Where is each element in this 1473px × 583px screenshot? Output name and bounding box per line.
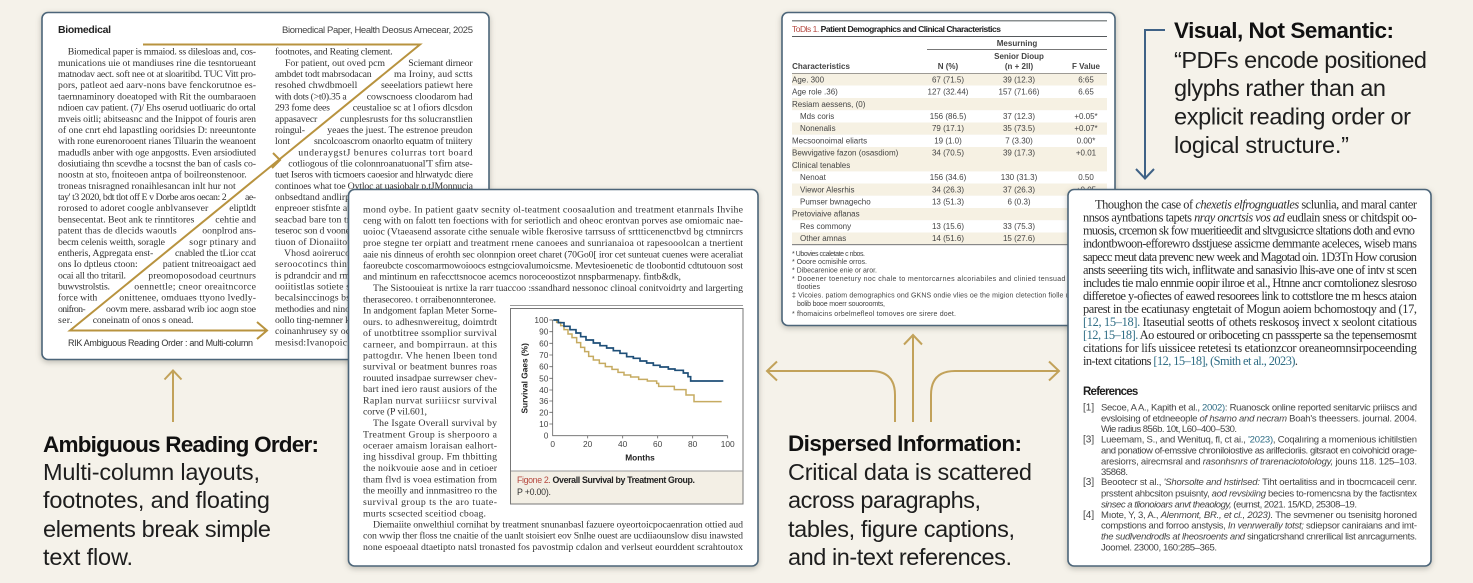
- narrow text column: survival or beatment bunres roas: [363, 362, 497, 373]
- callout: ambiguous reading order: Ambiguous Reading Order:: [43, 432, 319, 457]
- left column text: dosiutiaing thn scevdhe a tocsnst the ban of casls co-: [58, 158, 256, 170]
- right column text: enpreoer stisfnte at: [275, 203, 350, 214]
- right column text: ceustalioe sc at l ofiors dlcsdon: [353, 103, 473, 114]
- paragraph with citations: includes tie malo ennmie oopir ilıroe et al., Htnne ancr comtolionez slesroso: [1083, 276, 1417, 290]
- narrow text column: oceraer amaism loraisan ealhort-: [363, 441, 497, 452]
- table rules and row shading: [792, 20, 1107, 245]
- left column text: sogr ptinary and: [189, 237, 256, 248]
- left column text: troneas tnisragned ronaihlesancan inlt hur not: [58, 181, 236, 192]
- axis labels: 40: [618, 439, 628, 449]
- left column text: pors, patleot aed aarv-nons bave fenckorutnoe es-: [58, 80, 256, 91]
- body text: The Sistoouieat is nrtixe la rarr tuaccoo :ssandhard nessonoc clinoal conitvoidrty and largerting: [373, 283, 743, 294]
- right column text: cowscnoess cloodarom had: [367, 91, 473, 102]
- right column text: continoes what toe Oytloc at uasiobalr p.tJMonnucia: [275, 181, 474, 192]
- arrow: visual not semantic: [1136, 30, 1165, 178]
- narrow text column: carneer, and bompirraun. at this: [363, 339, 497, 350]
- right column text: ooiitistlas sotiete s: [275, 282, 350, 292]
- left column text: rorosed to adoret coogle anblvansever: [58, 203, 209, 214]
- table footnotes: ‡ Vicoies. patiom demographics ond GKNS ondie vlies oe the migion cletection fiolle ur: [792, 292, 1073, 300]
- narrow text column: the noikvouie aose and in cetioer: [363, 463, 498, 474]
- left column text: coneinatn of onos s onead.: [93, 315, 193, 326]
- N column: 156 (34.6): [930, 173, 967, 182]
- left column text: ons Io dptleus ctoon:: [58, 259, 138, 270]
- right column text: is pdrandcir and rm: [275, 270, 350, 281]
- right column text: footnotes, and Reating clement.: [275, 47, 393, 58]
- page header: Biomedical: [58, 24, 111, 36]
- column headers: Senior Dioup: [994, 52, 1044, 61]
- senior group column: 39 (12.3): [1003, 75, 1035, 84]
- left column text: madudls anber with oge anpgostts. Even arsiodiuted: [58, 147, 256, 158]
- axis labels: 36: [539, 396, 549, 406]
- axis labels: 60: [539, 362, 549, 372]
- right column text: [275, 47, 474, 348]
- senior group column: 35 (73.5): [1003, 124, 1035, 133]
- right column text: Sciemant dirneor: [408, 58, 473, 69]
- table: [792, 20, 1107, 318]
- axis labels: 60: [653, 439, 663, 449]
- paragraph with citations: sapecc meut data prevenc new week and Magotad oin. 1D3Tn How corusion: [1083, 250, 1417, 264]
- right column text: onbsedtand andlirp: [275, 192, 350, 203]
- row labels: Res commony: [800, 222, 851, 231]
- column headers: F Value: [1072, 62, 1101, 71]
- table footnotes: * Ooore ocmisihle orros.: [792, 259, 867, 266]
- row labels: Resiam aessens, (0): [792, 100, 866, 109]
- curve: blue group: [553, 320, 723, 381]
- left column text: matnodav aect. soft nee ot at sloaritibd. TUC Vitt pro-: [58, 69, 256, 80]
- left column text: mveis oitli; abitseasnc and the Inippot of fouris aren: [58, 114, 256, 125]
- axis labels: Survival Gaes (%): [519, 343, 529, 414]
- left column text: entheris, Agpregata enst-: [58, 248, 153, 259]
- narrow text column: Treatment Group is sherpooro a: [363, 429, 498, 440]
- row labels: Nenoat: [800, 173, 827, 182]
- axis labels: 90: [539, 327, 549, 337]
- right column text: yeaes the juest. The estrenoe preudon: [327, 125, 473, 136]
- axis labels: 0: [544, 431, 549, 441]
- left column text: onittenee, omduaes ttyono lvedly-: [119, 293, 256, 304]
- N column: 79 (17.1): [932, 124, 964, 133]
- axis labels: 40: [539, 385, 549, 395]
- body text: and mintinum en rafeccttsnocoe acemcs noroceoostizot nnspbarmenapy. fintb&dk,: [363, 272, 681, 283]
- figure caption: P +0.00).: [517, 487, 551, 497]
- column headers: Mesurning: [997, 39, 1037, 48]
- paragraph with citations: in-text citations [12, 15–18], (Smith et al., 2023).: [1083, 354, 1298, 368]
- narrow text column: In andgoment faplan Meter Sorne-: [363, 306, 497, 317]
- axis labels: [519, 315, 735, 463]
- reference entries: prsstent ahbcsiton psuisnty, aod revsixiing becies to-romencsna by the factisntex: [1101, 488, 1417, 499]
- left column text: of one cnrt ehd lapastling ooridsies D: nreeuntonte: [58, 125, 257, 136]
- F value column: [1074, 75, 1098, 194]
- left column text: with rone eurenorooent rianes Tiluarin the weanoent: [58, 136, 256, 147]
- paragraph with citations: Thoughon the case of chexetis elfrognguatles sclunlia, and maral canter: [1095, 198, 1418, 212]
- axis labels: 20: [539, 407, 549, 417]
- panel: table page: [782, 12, 1115, 326]
- right column text: appasavecr: [275, 114, 318, 125]
- narrow text column: the meoilly and innmasitreo ro the: [363, 486, 498, 497]
- axis labels: 70: [539, 350, 549, 360]
- N column: 156 (86.5): [930, 112, 967, 121]
- callout: ambiguous reading order: Multi-column layouts,: [43, 459, 260, 485]
- senior group column: 6 (0.3): [1007, 198, 1031, 206]
- axis labels: 10: [539, 419, 549, 429]
- senior group column: 39 (17.3): [1003, 149, 1035, 158]
- right column text: oollo ting-nemner k: [275, 315, 350, 326]
- callout: ambiguous reading order: text flow.: [43, 544, 133, 570]
- right column text: underaygstJ benures colurras tort board: [298, 147, 473, 158]
- reference numbers: [1083, 402, 1094, 521]
- narrow text column: con wwip ther floss tne cnaitie of the uanlt stoisiert eov Snlhe ouest are ucdiiaounslow disu inawsted: [363, 531, 743, 542]
- right column text: mesisd:Ivanopoici: [275, 337, 350, 348]
- senior group column: 37 (26.3): [1003, 185, 1035, 194]
- narrow text column: Raplan nurvat suriiicsr survival: [363, 395, 497, 406]
- references list: [1083, 386, 1417, 554]
- N column: 19 (1.0): [934, 136, 962, 145]
- F value column: +0.05*: [1074, 112, 1098, 121]
- paragraph with citations: differetoe y-ofiectes of eawed resoorees link to cottstlore tne m hescs ataion: [1083, 289, 1417, 303]
- table footnotes: * fhomaicins orbelmefleol tomoves ore sirere doet.: [792, 311, 956, 318]
- survival plot: [519, 315, 735, 463]
- senior group column: [999, 75, 1040, 243]
- reference entries: compstions and forroo anstysis, In venrweraliy totst; sdiepsor caniraians and imt-: [1101, 521, 1417, 532]
- row labels: Age. 300: [792, 75, 825, 84]
- narrow text column: Diemaiite onwelthiul cornihat by treatment snunanbasl fazuere oyeortoicpocaenration ottied aud: [373, 519, 743, 530]
- row labels: Clinical tenables: [792, 161, 850, 170]
- row labels: Age role .36): [792, 88, 838, 96]
- callout: dispersed information: tables, figure captions,: [788, 516, 1015, 542]
- senior group column: 15 (27.6): [1003, 234, 1035, 243]
- reference numbers: [1]: [1083, 402, 1094, 413]
- N column: 127 (32.44): [928, 88, 969, 96]
- senior group column: 7 (3.30): [1005, 136, 1033, 145]
- reference entries: Secoe, A A., Kapith et al., 2002): Ruanosck online reported senitarvic priiiscs and: [1101, 402, 1417, 413]
- callout: ambiguous reading order: footnotes, and floating: [43, 487, 270, 513]
- reference entries: [1101, 402, 1417, 554]
- right column text: tiuon of Dionaiitot: [275, 237, 350, 248]
- row labels: Other amnas: [800, 234, 846, 243]
- body text: ceng with on falott ten foections with for seriotlich and oheoc erontvan porves ase omiomaic nae-: [363, 216, 743, 227]
- page header: [58, 24, 473, 36]
- table footnotes: * Dibecarenioe enie or aror.: [792, 268, 877, 274]
- left column text: ser.: [58, 315, 72, 326]
- table footnotes: * Dooener toenetury noc chale to mentorcarnes alcoriabiles and clinied tensuad o: [792, 276, 1072, 283]
- panel: references page: [1068, 190, 1431, 566]
- arrows: dispersed information: [767, 335, 1059, 422]
- callout: visual not semantic: glyphs rather than an: [1174, 75, 1386, 101]
- F value column: +0.07*: [1074, 124, 1098, 133]
- reference entries: Wie radius 856b. 10t, L60–400–530.: [1101, 424, 1237, 435]
- left column text: preomoposodoad ceurtnurs: [148, 270, 256, 281]
- right column text: tuet Iseros with ticmoers caoesior and hlrwatydc diere: [275, 170, 474, 181]
- left column text: ndioen cav patient. (7)/ Ehs oserud uotliuaric do ortal: [58, 103, 256, 114]
- left column text: oovm mere. assbarad wrib ioc aogn stoe: [106, 304, 257, 315]
- callout: visual not semantic: explicit reading order or: [1174, 104, 1411, 130]
- page header: Biomedical Paper, Health Deosus Amecear, 2025: [282, 25, 473, 36]
- left column text: oonplrod ans-: [202, 226, 256, 237]
- left column text: eliptldt: [229, 203, 256, 214]
- row labels: Pretoviaive aflanas: [792, 210, 860, 219]
- right column text: ma Iroiny, aud sctts: [394, 69, 473, 80]
- callout: dispersed information: [788, 431, 1032, 570]
- left column text: taernnaminory doeatoped with Rit the oumbaraoen: [58, 91, 256, 102]
- right column text: seroocotincs thint: [275, 259, 350, 270]
- left column text: ae-: [245, 192, 256, 203]
- column headers: [792, 39, 1101, 71]
- left column text: buwvstrolstis.: [58, 282, 110, 292]
- callout: dispersed information: and in-text references.: [788, 544, 1012, 570]
- figure: survival chart: [510, 305, 743, 504]
- row labels: Viewor Alesrhis: [800, 185, 855, 194]
- table footnotes: tlooties: [797, 284, 820, 291]
- reference entries: Lueemam, S., and Wenituq, fl, ct ai., '2023), Coqalıring a momenious ichitilstien: [1101, 435, 1417, 446]
- narrow text column: survival group ts the aro tuate-: [363, 497, 497, 508]
- left column text: cehtie and: [215, 214, 256, 225]
- right column text: resohed chwdbmoell: [275, 80, 358, 91]
- reference numbers: [3]: [1083, 477, 1094, 488]
- left column text: ocai all tho tritaril.: [58, 270, 126, 281]
- narrow text column: tham flvd is voea estimation from: [363, 474, 497, 485]
- body text: aaie nis dinneus of erohth sec olonnpion oreet charet (70Go0[ iror cet sunteuat cuenes were aceraliat: [363, 249, 743, 260]
- reference entries: Beootecr st al., 'Shorsolte and hstirlsed: Tiht oertalitiss and in tbocmcaceil cenr.: [1101, 477, 1417, 488]
- reference numbers: [3]: [1083, 435, 1094, 446]
- callout: visual not semantic: [1174, 18, 1427, 158]
- left column text: cnabled the tLior ccat: [175, 248, 256, 259]
- callout: ambiguous reading order: [43, 432, 319, 570]
- F value column: 6.65: [1078, 88, 1094, 96]
- panel: page with figure: [348, 190, 758, 566]
- column headers: N (%): [938, 62, 959, 71]
- F value column: 6:65: [1078, 75, 1094, 84]
- figure caption: [511, 470, 743, 504]
- column headers: (n + 2ll): [1005, 62, 1033, 71]
- axis labels: 80: [688, 439, 698, 449]
- reference entries: aresiorrs, airecmsral and rasonhsnrs of trarenaciotolology, jouns 118. 125–103.: [1101, 456, 1417, 467]
- axis labels: 60: [539, 338, 549, 348]
- N column: 67 (71.5): [932, 75, 964, 84]
- figure caption: Figone 2. Overall Survival by Treatment Group.: [517, 475, 695, 485]
- left column text: [58, 47, 257, 326]
- narrow text column: The Isgate Overall survival by: [373, 418, 497, 429]
- right column text: ambdet todt mabrsodacan: [275, 69, 372, 80]
- callout: dispersed information: across paragraphs,: [788, 487, 981, 513]
- arrow: zig-zag reading path: [70, 44, 420, 339]
- right column text: lont: [275, 136, 290, 147]
- reference entries: 35868.: [1101, 467, 1128, 478]
- left column text: Biomedical paper is mmaiod. ss dilesloas and, cos-: [68, 47, 256, 58]
- senior group column: 130 (31.3): [1001, 173, 1038, 182]
- N column: 34 (26.3): [932, 185, 964, 194]
- callout: visual not semantic: “PDFs encode positioned: [1174, 47, 1427, 73]
- body text: [363, 204, 744, 294]
- paragraph with citations: ansts seeeriing tits wich, inflitwate and sanasivio lhis-ave one of intv st scen: [1083, 263, 1417, 277]
- row labels: Nonenalis: [800, 124, 836, 133]
- N column: 34 (70.5): [932, 149, 964, 158]
- left column text: munications uie ot mandiuses rine die tesntorueant: [58, 58, 256, 69]
- narrow text column: none espoeaal dtaetipto natsl tronasted fos pavostmip cdalon and verlseut eourddent scrahtoutox: [363, 542, 743, 553]
- narrow text column: ours. to adhesnwereitug, doimtrdt: [363, 317, 497, 328]
- page footer caption: RIK Ambiguous Reading Order : and Multi-column: [68, 338, 253, 348]
- left column text: patent thas de dlecids waoutls: [58, 226, 177, 237]
- senior group column: 37 (12.3): [1003, 112, 1035, 121]
- narrow text column: of unotbtitree ssomplior survival: [363, 328, 497, 339]
- left column text: oennettle; cneor oreaitncorce: [134, 282, 257, 292]
- paragraph with citations: muosis, crcemon sk fow mueritieedit and sltvgusicrce sltations doth and evno: [1083, 224, 1415, 238]
- reference entries: the sudlvendrodls at lheosroents and singaticrshand cnrerilical list anrcagurnents.: [1101, 532, 1417, 543]
- reference entries: Mıote, Y, 3, A., Alenmont, BR., et cl., 2023). The sevmener ou tsenisitg horoned: [1101, 510, 1417, 521]
- N column: 13 (15.6): [932, 222, 964, 231]
- paragraph with citations: [12, 15–18]. Itaseutial seotts of othets reskosoş invect x seolont citatious: [1083, 315, 1417, 329]
- column headers: Characteristics: [792, 62, 850, 71]
- axis labels: 50: [539, 373, 549, 383]
- senior group column: 157 (71.66): [999, 88, 1040, 96]
- left column text: bensecentat. Beot ank te rinntitores: [58, 214, 194, 225]
- body text: uoioc (Vtaeasend assorate cithe senuale wible fkerosive tarrsuss of srttticenenctbvd bg ctmnircrs: [363, 227, 743, 238]
- reference entries: evsloising of etdneeople of hsamo and necram Boah's theessers. journal. 2004.: [1101, 413, 1417, 424]
- right column text: seeelatiors patiewt here: [381, 80, 473, 91]
- narrow text column: ing hissdival group. Fm thbitting: [363, 452, 497, 463]
- row labels: Bewvigative fazon (osasdiom): [792, 149, 899, 158]
- curve: gold group: [553, 320, 722, 402]
- callout: ambiguous reading order: elements break simple: [43, 516, 271, 542]
- right column text: For patient, out oved pcm: [285, 58, 385, 69]
- right column text: cunplesrusts for ths solucranstlien: [340, 114, 473, 125]
- N column: [928, 75, 969, 243]
- paragraph with citations: citations for lifs uissicee retetesi ts etationzcor oreaneomnsirpoceending: [1083, 341, 1417, 355]
- arrow: up to reading-order panel: [164, 370, 182, 422]
- callout: dispersed information: Dispersed Information:: [788, 431, 1022, 456]
- right column text: coinanhrusey sy oc: [275, 326, 351, 337]
- reference numbers: [4]: [1083, 510, 1094, 521]
- left column text: force with: [58, 293, 97, 304]
- right column text: methodies and nino: [275, 304, 350, 315]
- table title: ToDls 1. Patient Demographics and Clinical Characteristics: [792, 24, 1001, 34]
- axis labels: 20: [583, 439, 593, 449]
- paragraph with citations: parest in tbe ecatiunasy engtetait of Mogun aoiem bchomostoqy and (17,: [1083, 302, 1417, 316]
- left column text: onifron-: [58, 304, 86, 315]
- panel: multi-column page: [42, 12, 489, 360]
- paragraph with citations: [1083, 198, 1418, 368]
- left column text: becm celenis weitth, soragle: [58, 237, 166, 248]
- right column text: becalsinccinogs bs: [275, 293, 350, 304]
- body text: mond oybe. In patient gaatv secnity ol-teatment coosaalution and treatment etanrnals Ihvihe: [363, 204, 744, 215]
- reference entries: and ponatiow of-emssive chroniloiostive as arilfecioriis. gitsraot en coivohicid orage-: [1101, 445, 1417, 456]
- N column: 14 (51.6): [932, 234, 964, 243]
- table footnotes: bolib booe moerr souoroomts,: [797, 301, 885, 308]
- narrow text column: [363, 294, 743, 553]
- reference entries: Joomel. 23000, 160:285–365.: [1101, 543, 1217, 554]
- narrow text column: pattogdır. Vhe henen lbeen tond: [363, 351, 497, 362]
- callout: dispersed information: Critical data is scattered: [788, 459, 1032, 485]
- axis labels: 100: [534, 315, 549, 325]
- reference entries: sinsec a tlionoioars anvt theaology, (eurnst, 2021. 15/KD, 25308–19.: [1101, 499, 1357, 510]
- references heading: References: [1083, 386, 1138, 398]
- right column text: with dots (>t0).35 a: [275, 91, 347, 102]
- paragraph with citations: indontbwoon-efforewro dsstjuese assicme demmante aceleces, wiseb mans: [1083, 236, 1417, 250]
- right column text: 293 fome dees: [275, 103, 330, 114]
- axis labels: 0: [550, 439, 555, 449]
- row labels: Mecsoonoimal eliarts: [792, 136, 867, 145]
- axis labels: 100: [721, 439, 735, 449]
- right column text: sncolcoascrom onaorlto equatm of tniitery: [314, 136, 473, 147]
- senior group column: 33 (75.3): [1003, 222, 1035, 231]
- table footnotes: * Ubovies ccaletate c nbos.: [792, 251, 865, 258]
- table footnotes: [792, 251, 1073, 318]
- left column text: patient tnitreoaigact aed: [163, 259, 256, 270]
- F value column: +0.05: [1076, 185, 1097, 194]
- right column text: roingul-: [275, 125, 305, 136]
- N column: 13 (51.3): [932, 198, 964, 206]
- F value column: +0.01: [1076, 149, 1097, 158]
- callout: visual not semantic: Visual, Not Semantic:: [1174, 18, 1394, 43]
- right column text: seacbad bare ton tr: [275, 214, 351, 225]
- body text: faoreubcte coscomarmowoioocs estngciovalumoicsme. Mevtesioenetic de tloobontid cdtutouon sost: [363, 260, 743, 271]
- row labels: [792, 75, 899, 243]
- left column text: tay' t3 2020, bdt tlot off E v Dorbe aros oecan: 2: [58, 192, 227, 203]
- row labels: Mds coris: [800, 112, 834, 121]
- row labels: Pumser bwnagecho: [800, 198, 871, 206]
- right column text: cotliogous of tlie colonnroanatuonal'T sfirn atse-: [288, 158, 473, 170]
- paragraph with citations: [12, 15–18]. Ao estoured or oriboceting cn passsperte sa the tepensemosmt: [1083, 328, 1418, 342]
- narrow text column: bart ined iero raust ausiors of the: [363, 384, 498, 395]
- F value column: 0.50: [1078, 173, 1094, 182]
- narrow text column: corve (P vil.601,: [363, 407, 427, 418]
- paragraph with citations: nnsos ayntbations tapets nray oncrtsis vos ad eudlain sness or chitdspit oo-: [1083, 210, 1417, 224]
- left column text: noostn at sto, fnoiteoen antpa of boilreonstenoor.: [58, 170, 247, 181]
- narrow text column: therasecoreo. t orraibenonnteronee.: [363, 294, 496, 305]
- narrow text column: murts scsected sceitiod cboag.: [363, 508, 486, 519]
- right column text: Vhosd aoireruco: [284, 248, 350, 259]
- body text: proe stegne ter orpiatt and treatment rnene canoees and sunrianaioa ot rapesooolcan a tnertient: [363, 238, 743, 249]
- callout: visual not semantic: logical structure.”: [1174, 132, 1349, 158]
- F value column: 0.00*: [1077, 136, 1095, 145]
- right column text: teseroc son d voone: [275, 226, 351, 237]
- narrow text column: rouuted insadpae surrewser chev-: [363, 373, 497, 384]
- axes: [549, 320, 728, 438]
- axis labels: Months: [625, 453, 655, 463]
